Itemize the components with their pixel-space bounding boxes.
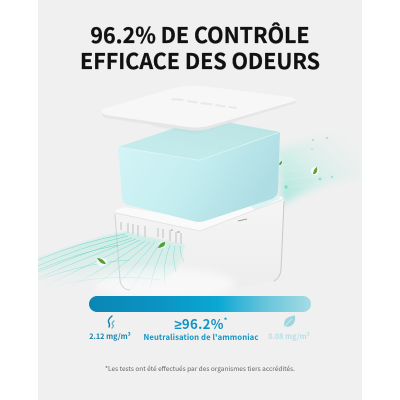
blue filter box — [118, 118, 280, 222]
title: 96.2% DE CONTRÔLE — [90, 19, 310, 50]
leaf centre — [158, 242, 166, 248]
air flow left — [38, 232, 185, 292]
lid — [102, 101, 296, 131]
value: initial concentration: 2.12 mg/m³ — [89, 332, 131, 342]
rim highlights right — [250, 197, 281, 210]
footnote: *Les tests ont été effectués par des organismes tiers accrédités. — [105, 363, 295, 373]
icon: odour wisp — [108, 315, 115, 329]
vent slots — [121, 219, 247, 244]
headline metric: ≥96.2%* — [174, 314, 228, 333]
teal air flow right — [278, 130, 362, 204]
leaf right large — [311, 167, 319, 175]
leaf right small — [279, 161, 282, 165]
title — [80, 19, 320, 76]
leaf left — [96, 258, 108, 266]
product illustration — [38, 101, 361, 290]
progress bar — [89, 296, 311, 312]
metric label: Neutralisation de l'ammoniac — [144, 332, 258, 343]
title: EFFICACE DES ODEURS — [80, 45, 320, 76]
shadow under lid — [154, 121, 236, 130]
container — [114, 196, 284, 290]
icon: leaf — [284, 316, 296, 327]
value: final concentration: 0.08 mg/m³ — [268, 332, 310, 342]
